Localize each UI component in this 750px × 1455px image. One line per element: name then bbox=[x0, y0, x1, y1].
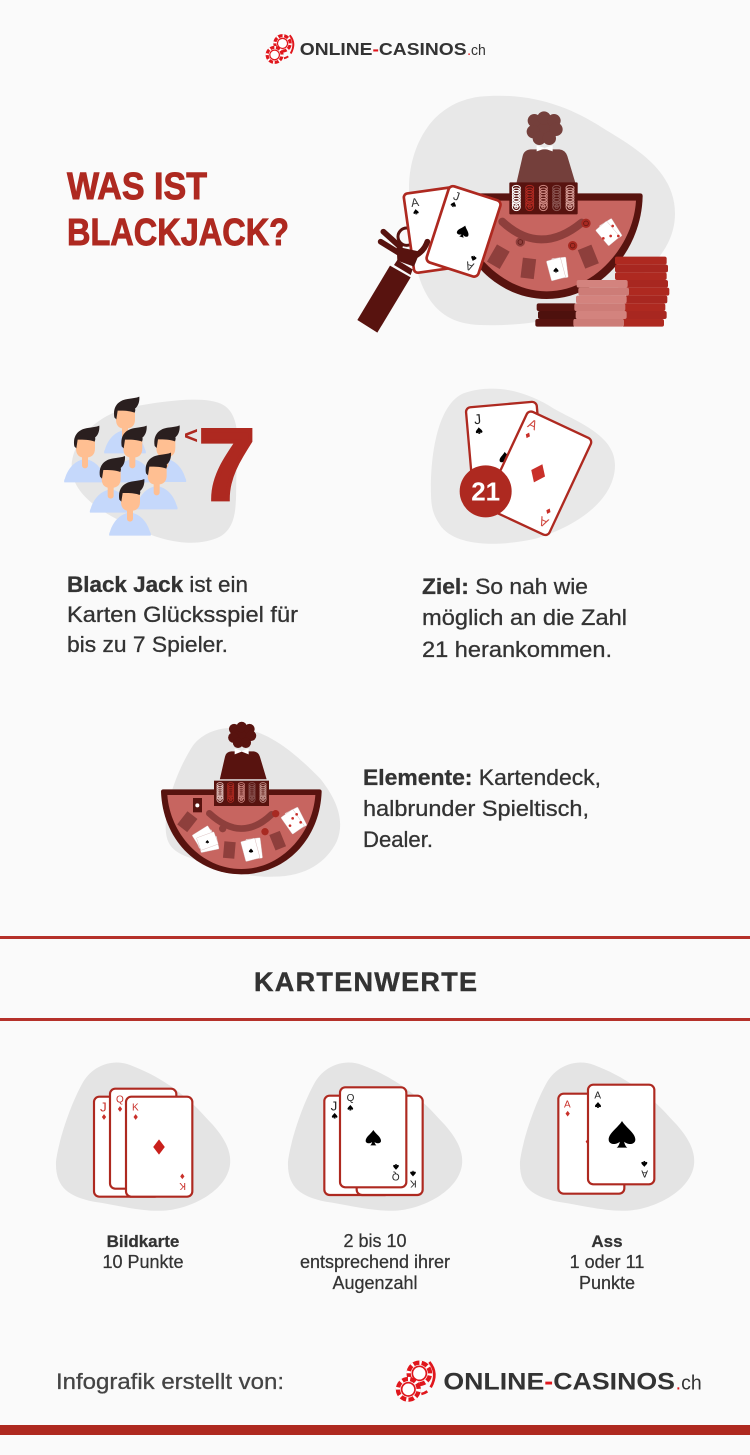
badge: 21 bbox=[460, 465, 512, 517]
text: players bbox=[67, 572, 298, 657]
section heading: card values: KARTENWERTE bbox=[254, 967, 477, 997]
panel: face cards: Q bbox=[116, 1094, 124, 1105]
footer credit text: Infografik erstellt von: bbox=[56, 1369, 284, 1394]
panel: aces: A bbox=[564, 1100, 571, 1111]
title: BLACKJACK? bbox=[67, 212, 289, 254]
panel: number cards: J bbox=[331, 1098, 337, 1113]
caption: number cards: 2 bis 10 bbox=[343, 1231, 407, 1251]
caption: face cards bbox=[102, 1232, 184, 1272]
title: WAS IST bbox=[67, 166, 207, 208]
panel: face cards: J bbox=[100, 1100, 107, 1115]
caption: aces: 1 oder 11 bbox=[570, 1252, 644, 1272]
caption: aces: Punkte bbox=[579, 1273, 635, 1293]
panel: number cards: Q bbox=[392, 1171, 400, 1182]
caption: face cards: Bildkarte bbox=[107, 1232, 179, 1251]
panel: aces: A bbox=[594, 1090, 601, 1101]
panel: aces bbox=[520, 1062, 694, 1211]
panel: number cards bbox=[288, 1062, 462, 1211]
playing card: jack bbox=[425, 185, 502, 278]
text: elements: halbrunder Spieltisch, bbox=[363, 796, 589, 821]
caption: face cards: 10 Punkte bbox=[102, 1252, 184, 1272]
footer logo: .ch bbox=[676, 1372, 702, 1394]
caption: number cards: entsprechend ihrer bbox=[300, 1252, 450, 1272]
top logo: .ch bbox=[467, 43, 486, 59]
panel: face cards: K bbox=[179, 1180, 186, 1191]
text: elements: Dealer. bbox=[363, 827, 433, 852]
text: goal bbox=[422, 574, 627, 662]
footer bar bbox=[0, 1425, 750, 1435]
panel: face cards: K bbox=[132, 1102, 139, 1113]
playing card: jack: A bbox=[464, 258, 476, 274]
title bbox=[67, 166, 289, 254]
footer logo bbox=[398, 1362, 702, 1400]
text: goal: 21 herankommen. bbox=[422, 637, 612, 662]
caption: aces bbox=[570, 1232, 644, 1293]
playing card: ace bbox=[403, 186, 468, 273]
text: elements: Elemente: Kartendeck, bbox=[363, 765, 601, 790]
illustration: goal 21: A bbox=[536, 513, 551, 531]
caption: aces: Ass bbox=[591, 1232, 623, 1251]
illustration: table with dealer bbox=[161, 722, 340, 877]
less than seven label: 7 bbox=[199, 409, 255, 521]
illustration: goal 21 bbox=[431, 389, 615, 544]
section heading: card values bbox=[0, 936, 750, 1021]
footer logo: ONLINE-CASINOS bbox=[443, 1368, 675, 1395]
top logo bbox=[267, 35, 486, 62]
illustration: goal 21: J bbox=[473, 411, 482, 427]
playing card: ace: A bbox=[410, 195, 420, 210]
panel: aces: A bbox=[641, 1168, 648, 1179]
badge: 21: 21 bbox=[471, 477, 500, 507]
less than seven label: < bbox=[184, 422, 198, 449]
panel: number cards: K bbox=[410, 1177, 417, 1188]
illustration: goal 21: A bbox=[525, 416, 540, 433]
text: elements bbox=[363, 765, 601, 852]
chip stacks bbox=[535, 257, 669, 327]
text: players: Black Jack ist ein bbox=[67, 572, 248, 597]
text: players: bis zu 7 Spieler. bbox=[67, 632, 228, 657]
caption: number cards: Augenzahl bbox=[332, 1273, 418, 1293]
top logo: ONLINE-CASINOS bbox=[300, 39, 467, 59]
panel: number cards: Q bbox=[347, 1093, 355, 1104]
text: players: Karten Glücksspiel für bbox=[67, 602, 298, 627]
caption: number cards bbox=[300, 1231, 450, 1293]
arm and hand bbox=[357, 266, 411, 333]
text: goal: Ziel: So nah wie bbox=[422, 574, 588, 599]
illustration: blackjack table with hand and chips bbox=[357, 96, 675, 333]
panel: face cards bbox=[56, 1062, 230, 1211]
illustration: seven players bbox=[64, 397, 255, 543]
text: goal: möglich an die Zahl bbox=[422, 605, 627, 630]
playing card: jack: J bbox=[452, 189, 462, 204]
